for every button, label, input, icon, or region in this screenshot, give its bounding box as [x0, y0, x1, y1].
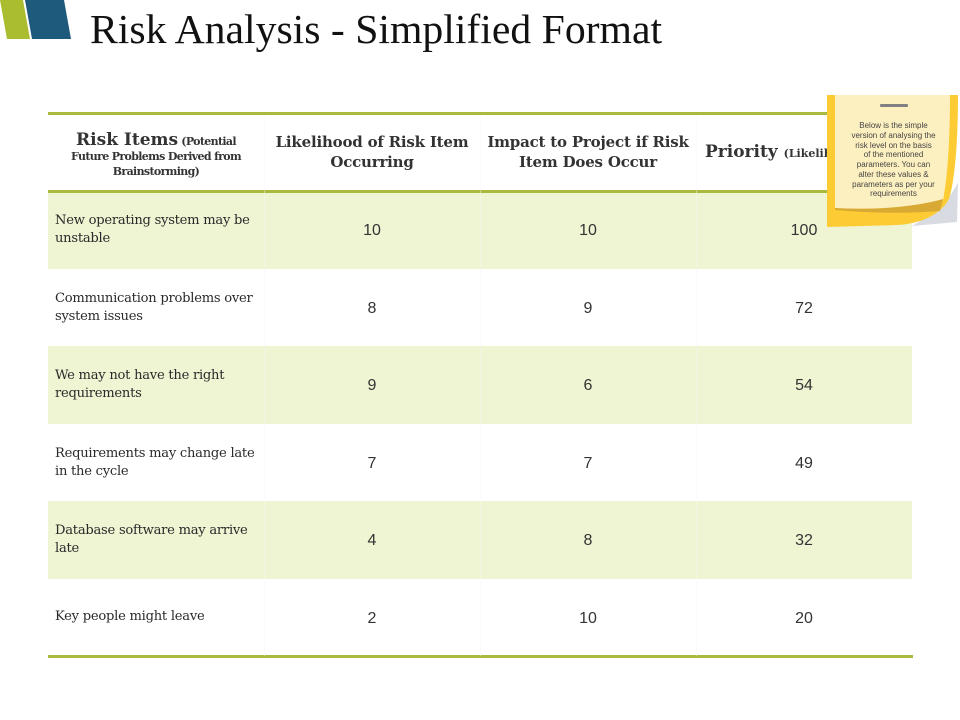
row 2 label: system issues: [55, 309, 143, 324]
row 3 label: requirements: [55, 386, 142, 401]
row 2 values: 9: [584, 300, 592, 317]
row 6 values: 20: [795, 610, 813, 627]
row 4 values: 7: [368, 455, 376, 472]
row 6 values: 2: [368, 610, 376, 627]
row 2 values: [368, 300, 813, 317]
row 3 values: 9: [368, 377, 376, 394]
row 5 label: [55, 523, 248, 556]
note handle: [880, 104, 908, 107]
header: likelihood: Occurring: [330, 153, 414, 171]
row 6 values: [368, 610, 813, 627]
row 1 label: New operating system may be: [55, 213, 250, 228]
row 2 values: 72: [795, 300, 813, 317]
note text: of the mentioned: [864, 150, 923, 159]
row 5 values: [368, 532, 813, 549]
note text: [851, 121, 936, 198]
row 4 label: [55, 446, 254, 479]
row 5 values: 4: [368, 532, 376, 549]
header: risk items: Future Problems Derived from: [71, 150, 241, 163]
header: impact: [487, 133, 690, 171]
note text: version of analysing the: [851, 131, 936, 140]
row 2 label: [55, 291, 253, 324]
header: risk items: Brainstorming): [113, 164, 199, 178]
row 3 values: 6: [584, 377, 592, 394]
note text: alter these values &: [858, 170, 929, 179]
row 1 values: 100: [791, 222, 817, 239]
note text: parameters. You can: [857, 160, 930, 169]
row 3 label: [55, 368, 224, 401]
row 1 values: [363, 222, 817, 239]
row 1 values: 10: [363, 222, 381, 239]
row 2 values: 8: [368, 300, 376, 317]
note text: Below is the simple: [859, 121, 928, 130]
header: impact: Item Does Occur: [519, 153, 657, 171]
row 4 label: Requirements may change late: [55, 446, 254, 461]
row 5 label: Database software may arrive: [55, 523, 248, 538]
row 4 values: 49: [795, 455, 813, 472]
header: likelihood: Likelihood of Risk Item: [276, 133, 468, 151]
decorative logo: [0, 0, 71, 39]
row 1 values: 10: [579, 222, 597, 239]
row 4 label: in the cycle: [55, 464, 128, 479]
title: Risk Analysis - Simplified Format: [90, 7, 662, 53]
row 5 label: late: [55, 541, 79, 556]
note text: requirements: [870, 189, 917, 198]
row 2 label: Communication problems over: [55, 291, 253, 306]
header: risk items: [71, 130, 242, 178]
header: risk items: Risk Items (Potential: [76, 130, 236, 150]
row 4 values: 7: [584, 455, 592, 472]
row 1 label: unstable: [55, 231, 110, 246]
note text: risk level on the basis: [855, 140, 932, 150]
header: priority: Priority (Likelihood x Impact): [705, 142, 917, 162]
row 5 values: 8: [584, 532, 592, 549]
note text: parameters as per your: [852, 180, 935, 188]
row 6 label: Key people might leave: [55, 609, 204, 624]
sticky note callout: [827, 95, 958, 227]
header: likelihood: [276, 133, 468, 171]
row 4 values: [368, 455, 813, 472]
row 5 values: 32: [795, 532, 813, 549]
header: impact: Impact to Project if Risk: [487, 133, 689, 151]
row 1 label: [55, 213, 250, 246]
row 6 values: 10: [579, 610, 597, 627]
row 3 values: 54: [795, 377, 813, 394]
row 3 label: We may not have the right: [55, 368, 224, 383]
row 3 values: [368, 377, 813, 394]
